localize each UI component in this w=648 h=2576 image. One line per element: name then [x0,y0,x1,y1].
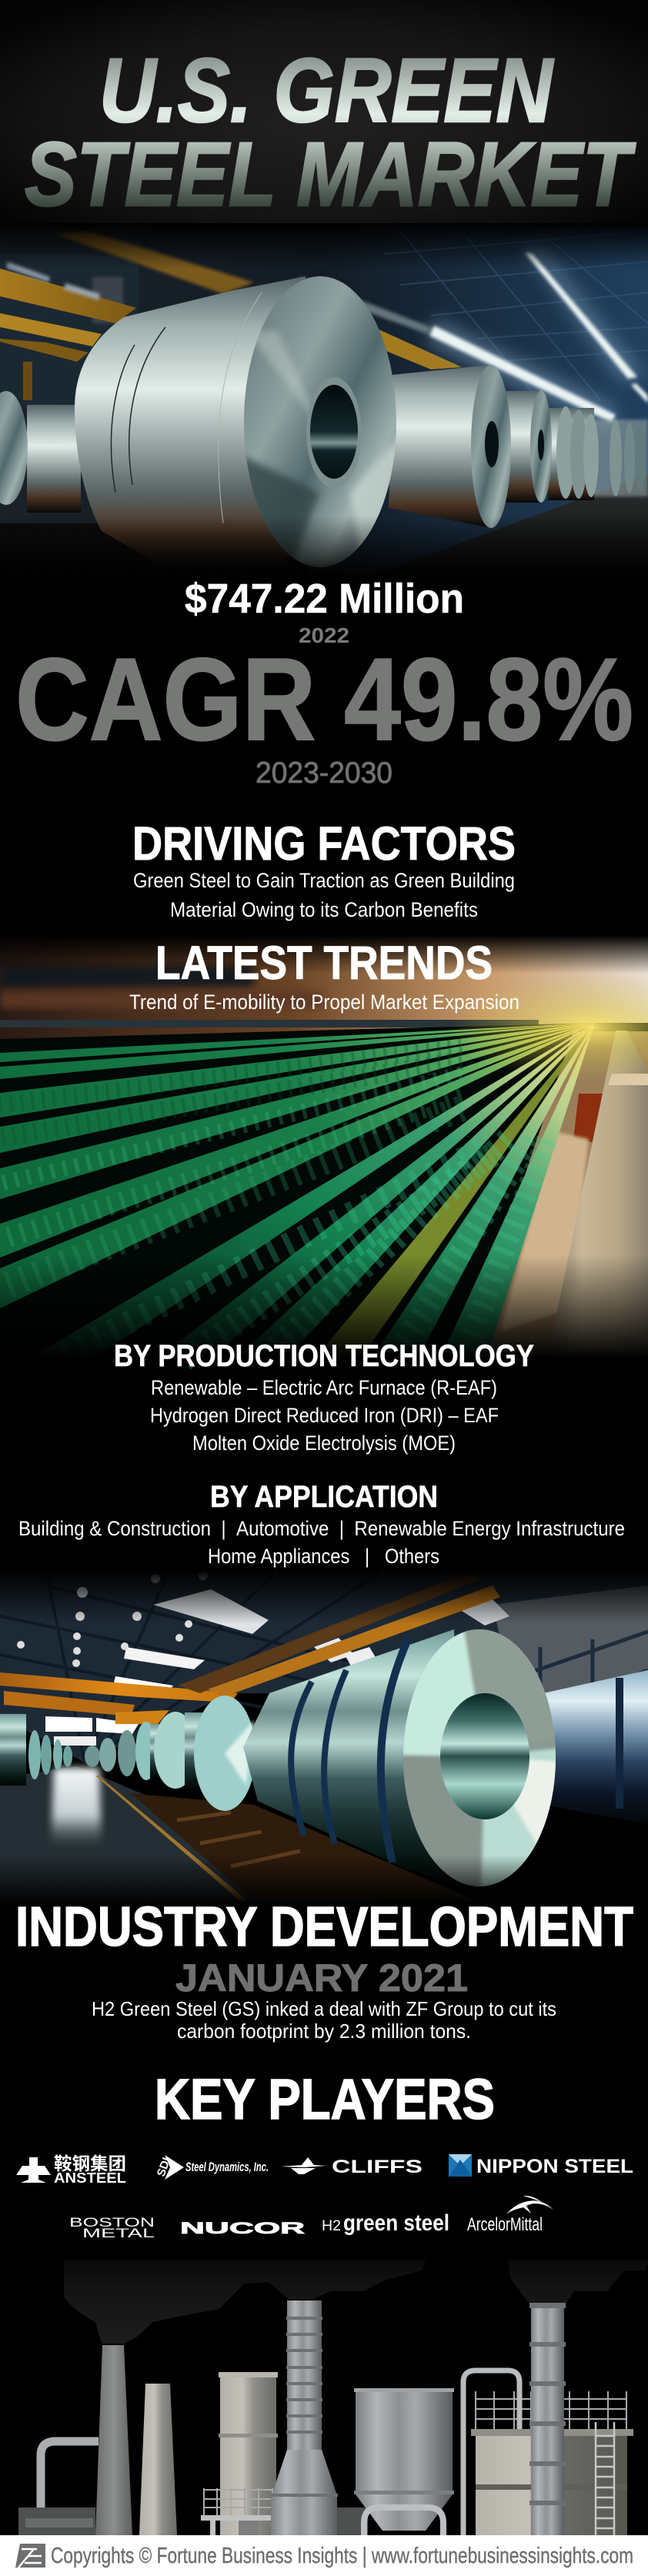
driving factors heading: DRIVING FACTORS [132,817,516,870]
logo: Ansteel [16,2153,126,2186]
logo: Steel Dynamics: Steel Dynamics, Inc. [185,2160,269,2174]
right railing [476,2391,626,2429]
application list: Home Appliances | Others [208,1545,439,1568]
background band [0,935,648,1043]
beige tank [219,2372,278,2535]
back wall left [0,254,139,408]
driving factors text [133,869,515,921]
logo: ArcelorMittal: ArcelorMittal [467,2214,543,2235]
forecast period: 2023-2030 [256,757,392,790]
title backdrop [0,0,648,223]
face highlights [246,328,396,559]
logo: Boston Metal: BOSTON [69,2215,155,2230]
logo: Steel Dynamics [155,2155,269,2180]
development text: carbon footprint by 2.3 million tons. [177,2020,471,2043]
title panel [0,0,648,226]
olive rod [312,1023,595,1362]
coil 2 [389,365,511,528]
logo: Ansteel: 鞍钢集团 [54,2153,126,2173]
left building [18,2508,95,2535]
lower image: steel coils in warehouse [0,1570,648,1906]
hero fades [0,223,648,269]
production technology list: Hydrogen Direct Reduced Iron (DRI) – EAF [150,1404,499,1427]
hero image: steel coils in factory [0,223,648,579]
floor [0,1766,385,1906]
development text [92,1997,556,2043]
coil face wedges [403,1629,556,1886]
coil face [403,1629,556,1886]
main coil [243,1629,556,1886]
logo: Ansteel: ANSTEEL [54,2170,126,2186]
right tank [471,2429,633,2535]
base year: 2022 [299,623,349,647]
coil end face [244,276,396,567]
crane beams [0,1575,500,1724]
platform railing [204,2488,272,2515]
right coil [543,1670,648,1824]
logo: H2 green steel: H2 [322,2218,341,2234]
factory illustration [18,2260,648,2535]
driving factors text: Green Steel to Gain Traction as Green Building [133,869,515,892]
footer [0,2535,648,2576]
ladder [596,2422,614,2535]
ceiling grid [385,231,648,400]
smoke [64,2260,648,2344]
distant coils right [85,1696,256,1811]
ceiling lights [17,1571,208,1667]
coil hole [440,1693,529,1819]
silo [354,2388,454,2535]
latest trends heading: LATEST TRENDS [155,937,493,989]
ground [0,1023,648,1362]
floor [369,474,648,577]
tall chimney [270,2300,338,2535]
platform table [201,2515,275,2535]
far coils [548,406,648,500]
key players heading: KEY PLAYERS [155,2067,495,2131]
title: U.S. GREEN [99,40,554,142]
rod ribs [0,1047,546,1362]
coil body seams [111,292,262,523]
logo: Nippon Steel: NIPPON STEEL [476,2156,633,2177]
top fade [0,935,648,974]
logo: Steel Dynamics: SDI [155,2156,173,2178]
driving factors text: Material Owing to its Carbon Benefits [170,898,478,921]
logo: ArcelorMittal [467,2196,553,2235]
logo: Cliffs: CLIFFS [332,2157,423,2177]
development text: H2 Green Steel (GS) inked a deal with ZF Group to cut its [92,1997,556,2020]
logos [16,2153,633,2240]
navy bands [291,1639,408,1863]
pallets [131,1793,477,1901]
bottom fade [0,1255,648,1358]
logo: Cliffs [281,2157,423,2177]
by application heading: BY APPLICATION [210,1480,438,1514]
ceiling [0,1570,648,1762]
tall pipe [463,2371,519,2535]
logo: H2 green steel: green steel [343,2210,449,2236]
logo: Boston Metal: METAL [82,2226,155,2240]
production technology list: Renewable – Electric Arc Furnace (R-EAF) [151,1376,497,1399]
vanishing point glow [446,974,648,1081]
left pipe [41,2441,99,2508]
left coil [0,391,81,513]
right chimney [529,2303,566,2535]
lower image fades [0,1570,648,1624]
logo: Boston Metal [69,2215,155,2240]
date: JANUARY 2021 [175,1956,468,2000]
windows [45,1589,509,1746]
market value: $747.22 Million [185,576,464,622]
main steel coil [75,276,404,573]
coil 3 [504,390,552,503]
distant coils left [0,1714,72,1786]
beige pipe [546,1031,648,1362]
latest trends text: Trend of E-mobility to Propel Market Expansion [129,991,519,1014]
logo: Nucor: NUCOR [180,2220,305,2237]
production technology list [150,1376,499,1455]
rebar image: green steel rods [0,935,648,1366]
footer logo [15,2544,45,2568]
coil hole [306,377,362,488]
right wall [493,1585,648,1770]
production technology list: Molten Oxide Electrolysis (MOE) [192,1432,456,1455]
chimney 2 [139,2384,177,2535]
title [25,40,636,226]
light strips [6,252,648,423]
by production technology heading: BY PRODUCTION TECHNOLOGY [114,1339,534,1373]
orange beams [0,231,462,400]
chimney 1 [95,2345,132,2535]
light glow [429,245,643,429]
application list [18,1517,625,1568]
rods [0,1023,595,1308]
